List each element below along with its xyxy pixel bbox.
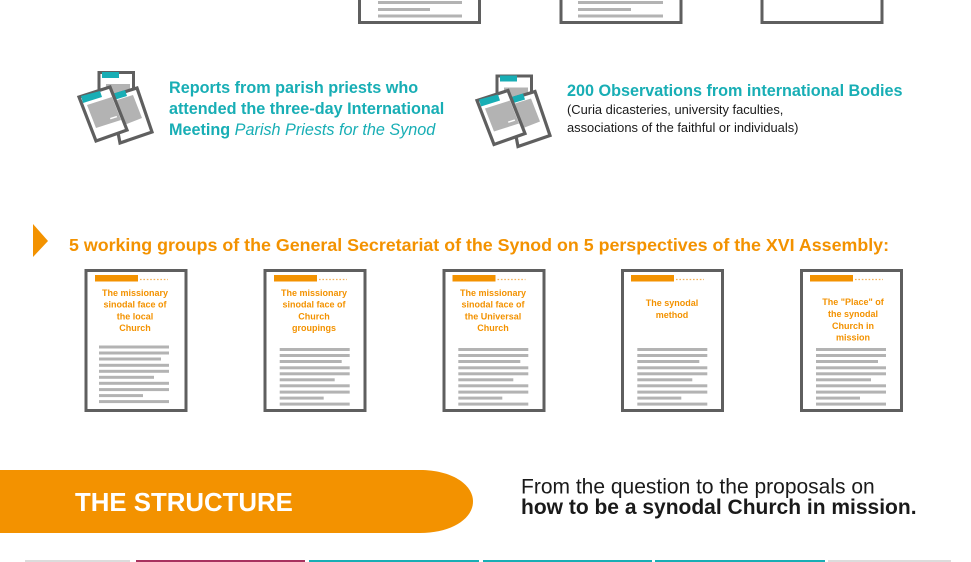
panel: document local Church: sinodal face of (103, 300, 168, 310)
panel: document Church groupings: The missionary (281, 288, 347, 298)
banner: the structure (0, 470, 473, 533)
icon: parish priests reports documents (79, 72, 152, 143)
heading: 5 working groups: 5 working groups of the General Secretariat of the Synod on 5 perspectives of the XVI Assembly: (69, 235, 889, 255)
panel: document local Church (86, 270, 186, 410)
panel: document Church groupings: groupings (292, 323, 336, 333)
text: observations from international bodies: (Curia dicasteries, university faculties, (567, 102, 783, 117)
panel: document Place of the synodal Church: mission (836, 332, 870, 342)
top document fragment 3 (762, 0, 882, 22)
panel: document synodal method (622, 270, 722, 410)
text: structure subtitle: From the question to the proposals on (521, 476, 875, 498)
text: reports from parish priests: Meeting Parish Priests for the Synod (169, 121, 435, 139)
top document fragment 1 (360, 0, 480, 22)
text: reports from parish priests: attended the three-day International (169, 100, 444, 118)
panel: document Church groupings: sinodal face of (282, 300, 347, 310)
panel: document Universal Church: sinodal face of (461, 300, 526, 310)
panel: document Universal Church: Church (477, 323, 509, 333)
panel: document Place of the synodal Church: the synodal (828, 309, 878, 319)
text: observations from international bodies: associations of the faithful or individuals) (567, 120, 798, 135)
panel: document local Church: The missionary (102, 288, 168, 298)
panel: document Church groupings: Church (298, 312, 330, 322)
panel: document Place of the synodal Church: The "Place" of (822, 297, 884, 307)
text: observations from international bodies (567, 82, 903, 135)
panel: document Place of the synodal Church (802, 270, 902, 410)
panel: document Universal Church: the Universal (465, 312, 521, 322)
icon: international bodies documents (477, 76, 550, 146)
panel: document synodal method: The synodal (646, 298, 698, 308)
panel: document Universal Church: The missionary (460, 288, 526, 298)
text: structure subtitle: how to be a synodal Church in mission. (521, 496, 917, 519)
bottom tabs row (25, 560, 951, 562)
text: reports from parish priests: Reports from parish priests who (169, 79, 418, 97)
icon: orange arrow marker (33, 224, 48, 257)
panel: document synodal method: method (656, 310, 688, 320)
text: observations from international bodies: 200 Observations from international Bodies (567, 82, 903, 100)
panel: document Place of the synodal Church: Church in (832, 321, 874, 331)
panel: document local Church: Church (119, 323, 151, 333)
top document fragment 2 (561, 0, 681, 22)
panel: document Universal Church (444, 270, 544, 410)
panel: document Church groupings (265, 270, 365, 410)
panel: document local Church: the local (117, 312, 153, 322)
banner: the structure: THE STRUCTURE (75, 489, 293, 517)
